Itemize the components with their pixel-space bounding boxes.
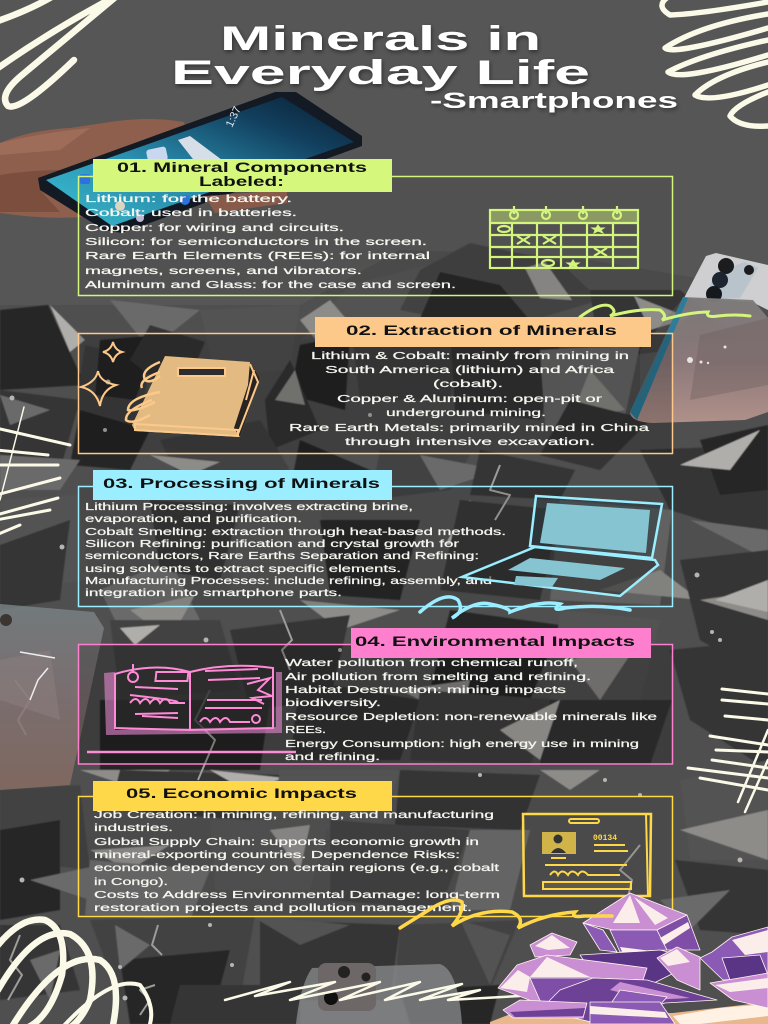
text: processing details: Cobalt Smelting: extraction through heat-based methods. (85, 526, 506, 538)
heading: 04 environmental: 04. Environmental Impacts (355, 634, 635, 649)
text: processing details: integration into smartphone parts. (85, 587, 342, 599)
squiggle: green (580, 305, 750, 320)
heading: 03 processing (93, 470, 392, 500)
image: hand holding smartphone: 1:37 (224, 105, 244, 129)
heading: 02 extraction: 02. Extraction of Minerals (346, 323, 617, 338)
underline stroke (87, 751, 296, 753)
image: smartphone with lens on the right, translucent (630, 253, 768, 423)
squiggle: yellow (400, 900, 612, 928)
text: processing details: Silicon Refining: purification and crystal growth for (85, 538, 460, 550)
text: economic details: Costs to Address Environmental Damage: long-term (94, 889, 500, 901)
text: economic details: economic dependency on certain regions (e.g., cobalt (94, 862, 499, 874)
icon: notebook (126, 356, 260, 437)
text: extraction details: Copper & Aluminum: open-pit or (337, 393, 603, 405)
text: environmental details: REEs. (285, 724, 326, 736)
text: environmental details: biodiversity. (285, 697, 381, 709)
text: economic details: in Congo). (94, 876, 168, 888)
title (171, 20, 678, 113)
text: processing details: semiconductors, Rare Earths Separation and Refining: (85, 550, 479, 562)
image: smartphone at bottom, translucent (296, 963, 462, 1024)
squiggle: cyan (420, 597, 630, 618)
panel: 02 extraction of minerals (78, 317, 672, 454)
text: components list: Aluminum and Glass: for the case and screen. (85, 279, 456, 291)
icon: calendar (490, 206, 638, 268)
scribble: left lines (0, 407, 70, 535)
text: extraction details (289, 350, 649, 448)
illustration: purple crystals (490, 893, 768, 1024)
text: extraction details: (cobalt). (433, 378, 503, 390)
panel: 04 environmental impacts (78, 628, 672, 764)
heading: 01 mineral components: 01. Mineral Components (117, 160, 367, 175)
scribble: top left (0, 0, 118, 107)
text: extraction details: Rare Earth Metals: primarily mined in China (289, 422, 649, 434)
heading: 01 mineral components (93, 159, 392, 192)
text: processing details (85, 501, 506, 599)
heading: 05 economic (93, 781, 392, 811)
text: economic details: Job Creation: in mining, refining, and manufacturing (94, 809, 494, 821)
text: environmental details: and refining. (285, 751, 380, 763)
heading: 02 extraction (315, 317, 651, 347)
image: smartphone on the left, translucent (0, 604, 104, 790)
text: environmental details: Resource Depletion: non-renewable minerals like (285, 711, 657, 723)
text: extraction details: through intensive excavation. (345, 436, 595, 448)
text: components list: Lithium: for the battery. (85, 193, 292, 205)
icon: open book (104, 664, 282, 735)
text: extraction details: South America (lithium) and Africa (325, 364, 614, 376)
heading: 04 environmental (351, 628, 651, 658)
icon: ID card: 00134 (593, 834, 617, 843)
text: components list: Rare Earth Elements (REEs): for internal (85, 250, 430, 262)
title: -Smartphones (430, 88, 678, 113)
panel: 03 processing of minerals (78, 470, 672, 618)
text: components list (85, 193, 456, 291)
heading: 01 mineral components: Labeled: (199, 174, 284, 189)
text: environmental details: Habitat Destruction: mining impacts (285, 684, 566, 696)
icon: laptop (462, 496, 662, 596)
text: components list: Silicon: for semiconductors in the screen. (85, 236, 427, 248)
title: Minerals in (220, 20, 541, 58)
scribble: top right (662, 0, 768, 126)
text: processing details: Manufacturing Processes: include refining, assembly, and (85, 575, 492, 587)
text: economic details (94, 809, 500, 914)
text: processing details: using solvents to extract specific elements. (85, 563, 401, 575)
scribble: bottom left loops (0, 920, 151, 1024)
icon: sparkles (81, 342, 122, 406)
text: components list: Copper: for wiring and circuits. (85, 222, 344, 234)
text: environmental details: Air pollution from smelting and refining. (285, 671, 591, 683)
text: economic details: restoration projects and pollution management. (94, 902, 472, 914)
scribble: right lines (688, 689, 768, 812)
text: economic details: mineral-exporting countries. Dependence Risks: (94, 849, 460, 861)
heading: 05 economic: 05. Economic Impacts (126, 786, 357, 801)
text: economic details: Global Supply Chain: supports economic growth in (94, 836, 479, 848)
text: extraction details: underground mining. (386, 407, 546, 419)
image: hand holding smartphone (0, 92, 362, 233)
scribble: bottom zigzag (225, 982, 520, 1000)
text: economic details: industries. (94, 822, 173, 834)
text: processing details: evaporation, and purification. (85, 513, 302, 525)
panel: 01 mineral components (78, 159, 672, 296)
title: Everyday Life (171, 54, 590, 92)
text: environmental details (285, 657, 657, 763)
text: processing details: Lithium Processing: involves extracting brine, (85, 501, 413, 513)
text: environmental details: Water pollution from chemical runoff, (285, 657, 578, 669)
text: environmental details: Energy Consumption: high energy use in mining (285, 738, 639, 750)
text: components list: magnets, screens, and vibrators. (85, 265, 362, 277)
text: extraction details: Lithium & Cobalt: mainly from mining in (311, 350, 629, 362)
icon: ID card (523, 813, 651, 896)
panel: 05 economic impacts (78, 781, 672, 916)
heading: 03 processing: 03. Processing of Minerals (103, 476, 380, 491)
text: components list: Cobalt: used in batteries. (85, 207, 297, 219)
